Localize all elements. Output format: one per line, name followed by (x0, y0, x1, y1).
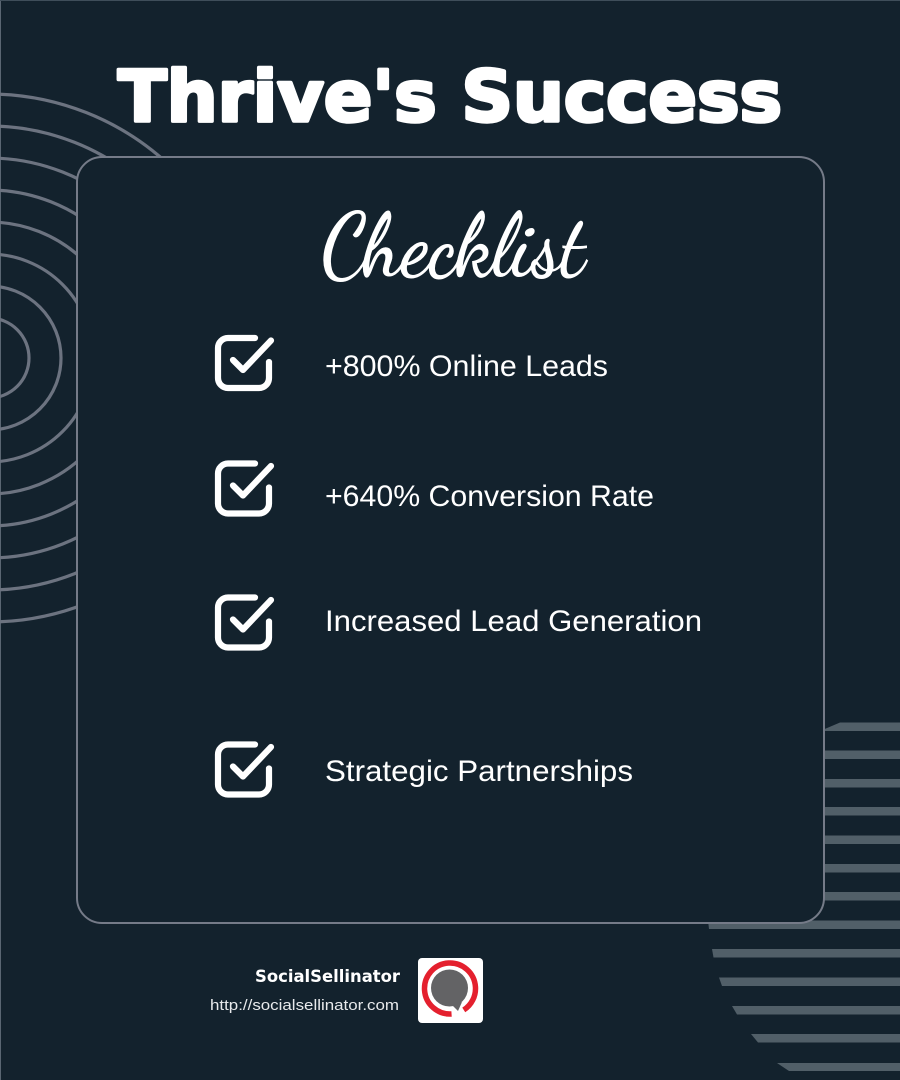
icon: checkbox 3 (218, 598, 271, 648)
striped circle decoration (708, 722, 900, 1071)
icon: checkbox 1 (218, 338, 271, 388)
concentric rings decoration (0, 94, 253, 622)
item 2: conversion rate (218, 464, 654, 514)
item 1: online leads (218, 338, 608, 388)
title: Thrive's Success (118, 56, 782, 138)
text: +800% Online Leads: +800% Online Leads (325, 350, 608, 383)
website url: http://socialsellinator.com (210, 997, 399, 1014)
text: Strategic Partnerships: Strategic Partnerships (325, 755, 633, 788)
panel background (77, 157, 824, 923)
icon: checkbox 2 (218, 464, 271, 514)
text: Increased Lead Generation: Increased Lead Generation (325, 605, 702, 638)
heading: Checklist: Checklist (322, 193, 588, 299)
brand name: SocialSellinator (255, 967, 401, 986)
item 4: strategic partnerships (218, 744, 633, 794)
text: +640% Conversion Rate: +640% Conversion Rate (325, 480, 654, 513)
item 3: lead generation (218, 598, 702, 648)
icon: checkbox 4 (218, 744, 271, 794)
icon: logo (418, 958, 483, 1023)
panel: checklist (77, 157, 824, 923)
